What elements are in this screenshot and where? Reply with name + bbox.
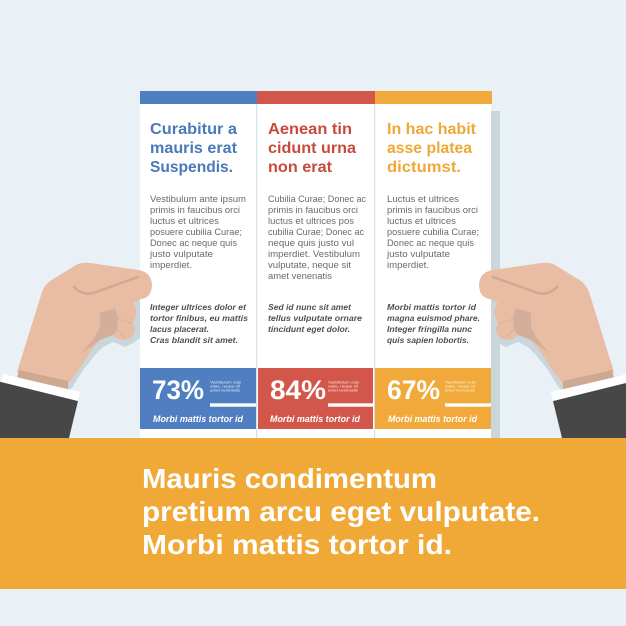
left hand shadow xyxy=(60,298,140,390)
blue body text xyxy=(149,194,246,270)
blue stat block 73%: amet venenatis xyxy=(210,388,240,392)
red italic text: Sed id nunc sit amet xyxy=(268,302,352,312)
yellow stat block 67%: Morbi mattis tortor id xyxy=(388,414,478,424)
blue body text: luctus et ultrices xyxy=(150,216,219,226)
blue heading: Curabitur a xyxy=(150,121,237,138)
yellow stat block 67%: amet venenatis xyxy=(445,388,475,392)
red body text: imperdiet. Vestibulum xyxy=(268,249,360,259)
blue stat block 73%: Morbi mattis tortor id xyxy=(153,414,244,424)
red top bar xyxy=(257,91,375,104)
yellow heading xyxy=(387,121,476,176)
yellow body text xyxy=(386,194,479,270)
red italic text xyxy=(268,302,362,334)
panel: blue column xyxy=(140,91,257,429)
red body text: Cubilia Curae; Donec ac xyxy=(268,194,366,204)
blue heading xyxy=(150,121,237,176)
red stat block 84% xyxy=(258,368,373,429)
icon: right hand holding paper xyxy=(479,263,626,438)
red body text: vulputate, neque sit xyxy=(268,260,351,270)
yellow body text: imperdiet. xyxy=(387,260,429,270)
red body text: cubilia Curae; Donec ac xyxy=(268,227,364,237)
red body text: neque quis justo vul xyxy=(268,238,354,248)
yellow stat block 67% xyxy=(375,368,491,429)
yellow italic text: Integer fringilla nunc xyxy=(387,324,472,334)
right hand shadow xyxy=(491,298,571,390)
yellow heading: dictumst. xyxy=(387,159,461,176)
red body text xyxy=(268,194,366,281)
blue stat block 73% xyxy=(140,368,256,429)
banner headline: pretium arcu eget vulputate. xyxy=(142,496,540,527)
red stat block 84%: Morbi mattis tortor id xyxy=(270,414,361,424)
panel: red column xyxy=(257,91,375,429)
blue body text: posuere cubilia Curae; xyxy=(150,227,242,237)
blue top bar xyxy=(140,91,257,104)
red body text: luctus et ultrices pos xyxy=(268,216,354,226)
red stat block 84%: 84% xyxy=(270,375,326,405)
yellow stat block 67%: 67% xyxy=(387,375,440,405)
red heading: cidunt urna xyxy=(268,140,356,157)
yellow italic text: Morbi mattis tortor id xyxy=(387,302,477,312)
red stat block 84%: utate, neque sit xyxy=(328,384,359,388)
blue heading: mauris erat xyxy=(150,140,237,157)
paper shadow xyxy=(491,111,500,439)
red body text: amet venenatis xyxy=(268,271,332,281)
blue italic text: lacus placerat. xyxy=(150,324,209,334)
blue body text: Donec ac neque quis xyxy=(150,238,237,248)
yellow italic text xyxy=(387,302,480,345)
blue heading: Suspendis. xyxy=(150,159,233,176)
bottom banner xyxy=(0,438,626,589)
yellow stat block 67%: Vestibulum vulp xyxy=(445,380,477,384)
blue body text: justo vulputate xyxy=(149,249,213,259)
blue body text: primis in faucibus orci xyxy=(150,205,240,215)
yellow body text: justo vulputate xyxy=(386,249,450,259)
panel: yellow column xyxy=(375,91,492,429)
yellow stat block 67%: utate, neque sit xyxy=(445,384,476,388)
blue italic text xyxy=(150,302,248,345)
blue italic text: tortor finibus, eu mattis xyxy=(150,313,248,323)
red italic text: tellus vulputate ornare xyxy=(268,313,362,323)
banner headline xyxy=(142,463,540,560)
red stat block 84%: amet venenatis xyxy=(328,388,358,392)
blue stat block 73%: 73% xyxy=(152,375,204,405)
banner headline: Mauris condimentum xyxy=(142,463,437,494)
red body text: primis in faucibus orci xyxy=(268,205,358,215)
blue body text: imperdiet. xyxy=(150,260,192,270)
yellow heading: asse platea xyxy=(387,140,472,157)
paper xyxy=(140,104,491,438)
yellow body text: Luctus et ultrices xyxy=(387,194,459,204)
red italic text: tincidunt eget dolor. xyxy=(268,324,350,334)
yellow body text: posuere cubilia Curae; xyxy=(387,227,479,237)
red heading: Aenean tin xyxy=(268,121,352,138)
blue body text: Vestibulum ante ipsum xyxy=(150,194,246,204)
blue stat block 73%: utate, neque sit xyxy=(210,384,241,388)
yellow italic text: magna euismod phare. xyxy=(387,313,480,323)
red stat block 84%: Vestibulum vulp xyxy=(328,380,360,384)
red heading xyxy=(268,121,356,176)
icon: left hand holding paper xyxy=(0,263,152,438)
blue italic text: Cras blandit sit amet. xyxy=(150,335,238,345)
yellow body text: primis in faucibus orci xyxy=(387,205,478,215)
yellow heading: In hac habit xyxy=(387,121,476,138)
blue italic text: Integer ultrices dolor et xyxy=(150,302,247,312)
banner headline: Morbi mattis tortor id. xyxy=(142,529,452,560)
red heading: non erat xyxy=(268,159,332,176)
yellow body text: luctus et ultrices xyxy=(387,216,456,226)
yellow body text: Donec ac neque quis xyxy=(387,238,474,248)
blue stat block 73%: Vestibulum vulp xyxy=(210,380,242,384)
yellow italic text: quis sapien lobortis. xyxy=(387,335,469,345)
yellow top bar xyxy=(375,91,492,104)
